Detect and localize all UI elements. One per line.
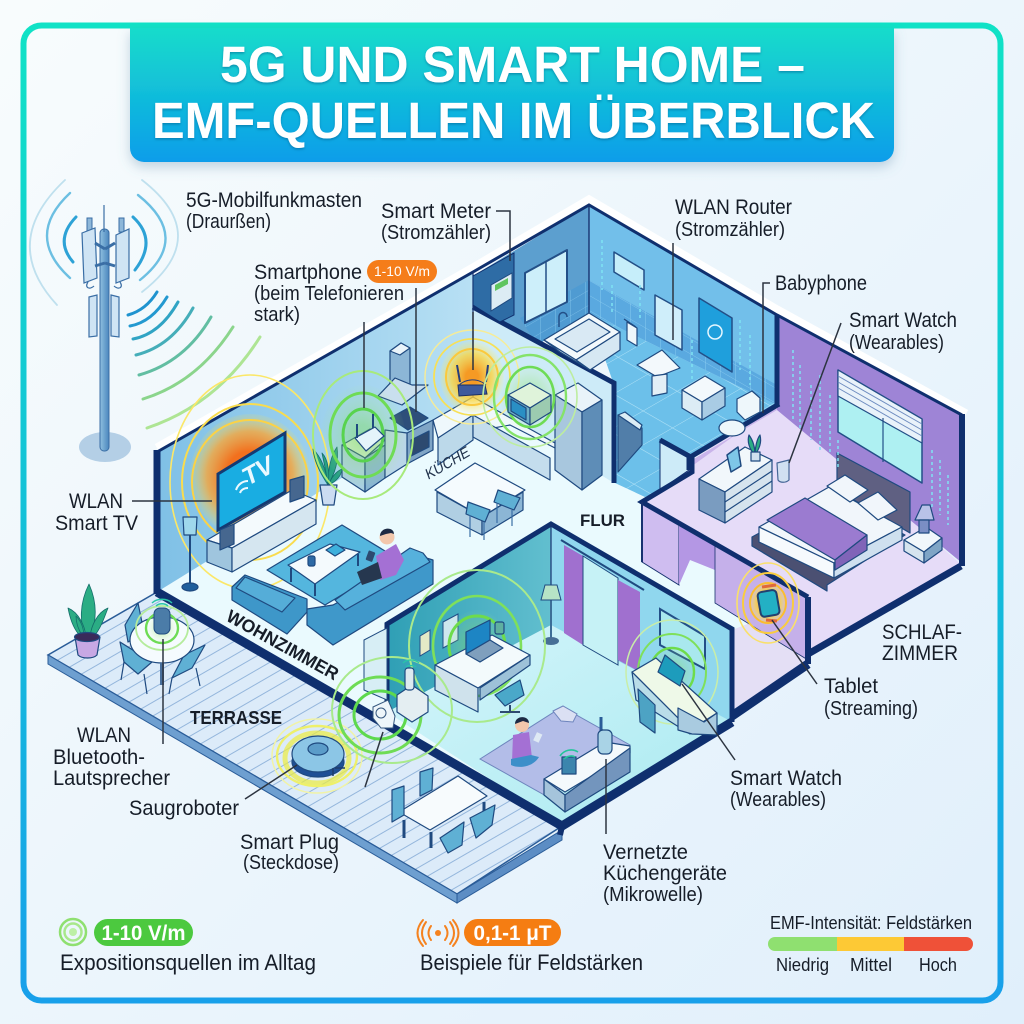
label: networked kitchen devices: (Mikrowelle) [603,884,703,906]
legend: orange field strength examples: Beispiele für Feldstärken [420,950,643,975]
floor lamp [189,535,191,585]
label: Smartphone [254,260,404,326]
bed frame [752,495,905,591]
icon: smart speaker [154,608,170,634]
icon: vacuum robot [292,736,345,777]
rug [480,707,630,797]
TV set: TV [237,450,281,491]
room label: Flur: FLUR [580,511,625,530]
label: WLAN Router: WLAN Router [675,195,792,219]
bedside lamp [915,505,934,520]
room label: Wohnzimmer: WOHNZIMMER [223,606,342,684]
data streams on walls [602,240,948,525]
legend: green exposure sources [60,919,316,975]
dresser [699,447,772,492]
bedroom wall outlines [642,404,808,597]
stools [466,490,520,522]
curtains and balcony door [564,545,583,645]
child with phone [511,717,542,767]
legend: orange field strength examples [418,919,643,975]
EMF rings: left router [313,371,413,499]
bathroom floor [589,313,777,497]
label: networked kitchen devices: Vernetzte [603,840,688,864]
plant [313,447,342,485]
toilet [737,391,760,420]
office left wall [387,524,551,712]
room label: Schlafzimmer [882,621,962,665]
EMF rings: speaker [136,599,188,650]
bath vanity [618,415,642,472]
label: Smart TV: WLAN [69,489,123,513]
legend: orange field strength examples: 0,1-1 μT [474,922,552,945]
stove [390,407,428,430]
fridge [555,383,602,412]
label: networked kitchen devices: Küchengeräte [603,861,727,885]
cabinets run [433,397,555,448]
pillows [827,475,868,502]
blanket [767,498,867,560]
title banner [130,28,894,162]
legend: green exposure sources: 1-10 V/m [102,922,186,945]
office right wall [551,524,732,722]
living room wall [157,272,473,592]
outdoor dining table [399,776,487,830]
bedroom floor [642,405,962,652]
label: Smart Watch bottom: Smart Watch [730,766,842,790]
room label: Schlafzimmer: SCHLAF- [882,621,962,644]
smart meter [473,253,514,322]
bedroom front walls [642,502,679,585]
EMF rings: tablet desk [626,620,718,724]
label: Smart Plug [240,830,339,874]
EMF rings: vacuum robot [272,719,362,793]
icon: router center [457,365,488,396]
legend: EMF intensity scale: EMF-Intensität: Feldstärken [770,912,972,933]
EMF rings: microwave [483,347,577,447]
walls [157,200,966,664]
EMF rings: smart plug [332,657,452,763]
small window [614,252,644,290]
EMF rings: smart watch [737,563,799,643]
label: Bluetooth speaker: WLAN [77,723,131,747]
TV stand [207,490,316,548]
carpet [267,525,400,605]
title: 5G UND SMART HOME – [220,36,805,93]
label: Tablet: Tablet [824,674,878,698]
glass [777,460,789,482]
room label: Schlafzimmer: ZIMMER [882,642,958,665]
EMF rings: smart TV [170,375,330,589]
floor lamp [550,600,552,640]
label: WLAN Router [675,195,792,241]
living room furniture [182,447,433,645]
icon: 5G mobile mast with radio waves [30,180,260,462]
legend: EMF intensity scale [768,912,973,975]
round table and chairs [125,603,144,642]
bathroom right wall [589,205,777,405]
label: Bluetooth speaker: Lautsprecher [53,766,170,790]
label: Smart Watch bottom [730,766,842,811]
nightstand [904,527,942,552]
label: Smart Meter: (Stromzähler) [381,222,491,244]
icon: green rings [60,919,86,945]
bathroom left wall [473,205,589,345]
person on sofa [380,530,394,544]
label: 5G mast: 5G-Mobilfunkmasten [186,188,362,212]
label: Tablet [824,674,918,720]
sink [637,350,680,377]
kitchen right wall [473,307,614,483]
title [152,36,875,149]
label: Smart TV: Smart TV [55,511,139,535]
label: Smart TV [55,489,139,535]
mirror [655,295,682,350]
top edge [157,205,962,452]
icon: smart watch [757,585,780,621]
label: Smartphone: Smartphone [254,260,362,284]
legend: EMF intensity scale: Niedrig [776,954,829,975]
label: Smart Plug: Smart Plug [240,830,339,854]
label: WLAN Router: (Stromzähler) [675,219,785,241]
label: Bluetooth speaker [53,723,170,790]
bedroom back wall [777,315,962,563]
label: Babyphone: Babyphone [775,271,867,295]
speakers [290,476,304,502]
legend: EMF intensity scale: Mittel [850,954,892,975]
lower cabinet with router [342,429,385,458]
bathroom furniture [525,250,760,472]
bedroom furniture [699,370,942,591]
label: Smartphone: (beim Telefonieren [254,283,404,305]
kitchen island [435,463,525,517]
label: Bluetooth speaker: Bluetooth- [53,745,145,769]
bath cabinet [682,376,725,402]
kitchen label: KÜCHE [423,442,472,484]
title: EMF-QUELLEN IM ÜBERBLICK [152,92,875,149]
coffee table [288,544,360,584]
bathtub [544,313,620,360]
EMF rings: laptop [409,570,545,722]
badge: smartphone field strength [367,260,437,283]
bed headboard [837,453,910,533]
label: Smart Plug: (Steckdose) [243,852,339,874]
kitchen furniture [342,343,602,540]
badge: smartphone field strength: 1-10 V/m [374,263,430,279]
label: Smart Meter [381,199,491,244]
media bench [544,717,630,812]
terrace deck [48,592,562,903]
label: Smart Watch top: (Wearables) [849,332,944,354]
legend: EMF intensity scale: Hoch [919,954,957,975]
icon: smart plug [373,700,395,728]
wall picture window [660,609,705,669]
mattress [759,487,902,563]
office floor [387,625,732,826]
legend: green exposure sources: Expositionsquellen im Alltag [60,950,316,975]
label: Smart Watch top: Smart Watch [849,308,957,332]
label: 5G mast: (Draurßen) [186,211,271,233]
TV set [218,433,285,530]
label: Smart Watch bottom: (Wearables) [730,789,826,811]
label: Tablet: (Streaming) [824,698,918,720]
second desk with tablet [632,655,717,735]
right sofa [307,557,433,645]
pictures on wall [420,630,430,656]
leader lines [132,211,841,834]
thick front walls [157,592,732,826]
window with blinds [838,370,922,483]
towel [624,319,637,346]
corridor floor patch [732,600,808,712]
EMF rings: central router [425,330,519,424]
label: Smart Watch top [849,308,957,354]
icon: orange broadcast [418,920,458,946]
room label: Terrasse: TERRASSE [190,708,282,728]
label: networked kitchen devices [603,840,727,906]
desk with laptop [435,620,530,713]
plant in pot [68,584,108,640]
icon: router left [355,414,384,451]
label: Saugroboter: Saugroboter [129,796,239,820]
small plant [748,435,761,455]
office room [157,524,961,835]
left sofa [232,575,307,634]
white roof edge [157,200,966,448]
bath stub wall [660,440,689,490]
label: Smart Meter: Smart Meter [381,199,491,223]
icon: repeater device [397,660,428,722]
icon: microwave [508,383,551,425]
label: 5G mast [186,188,362,233]
terrace furniture [68,584,495,853]
oven [407,420,433,464]
wall stub with box [364,628,387,700]
window [525,250,567,323]
label: Smartphone: stark) [254,304,300,326]
extractor hood [390,343,410,387]
house floors [157,313,962,826]
poster [699,298,732,372]
